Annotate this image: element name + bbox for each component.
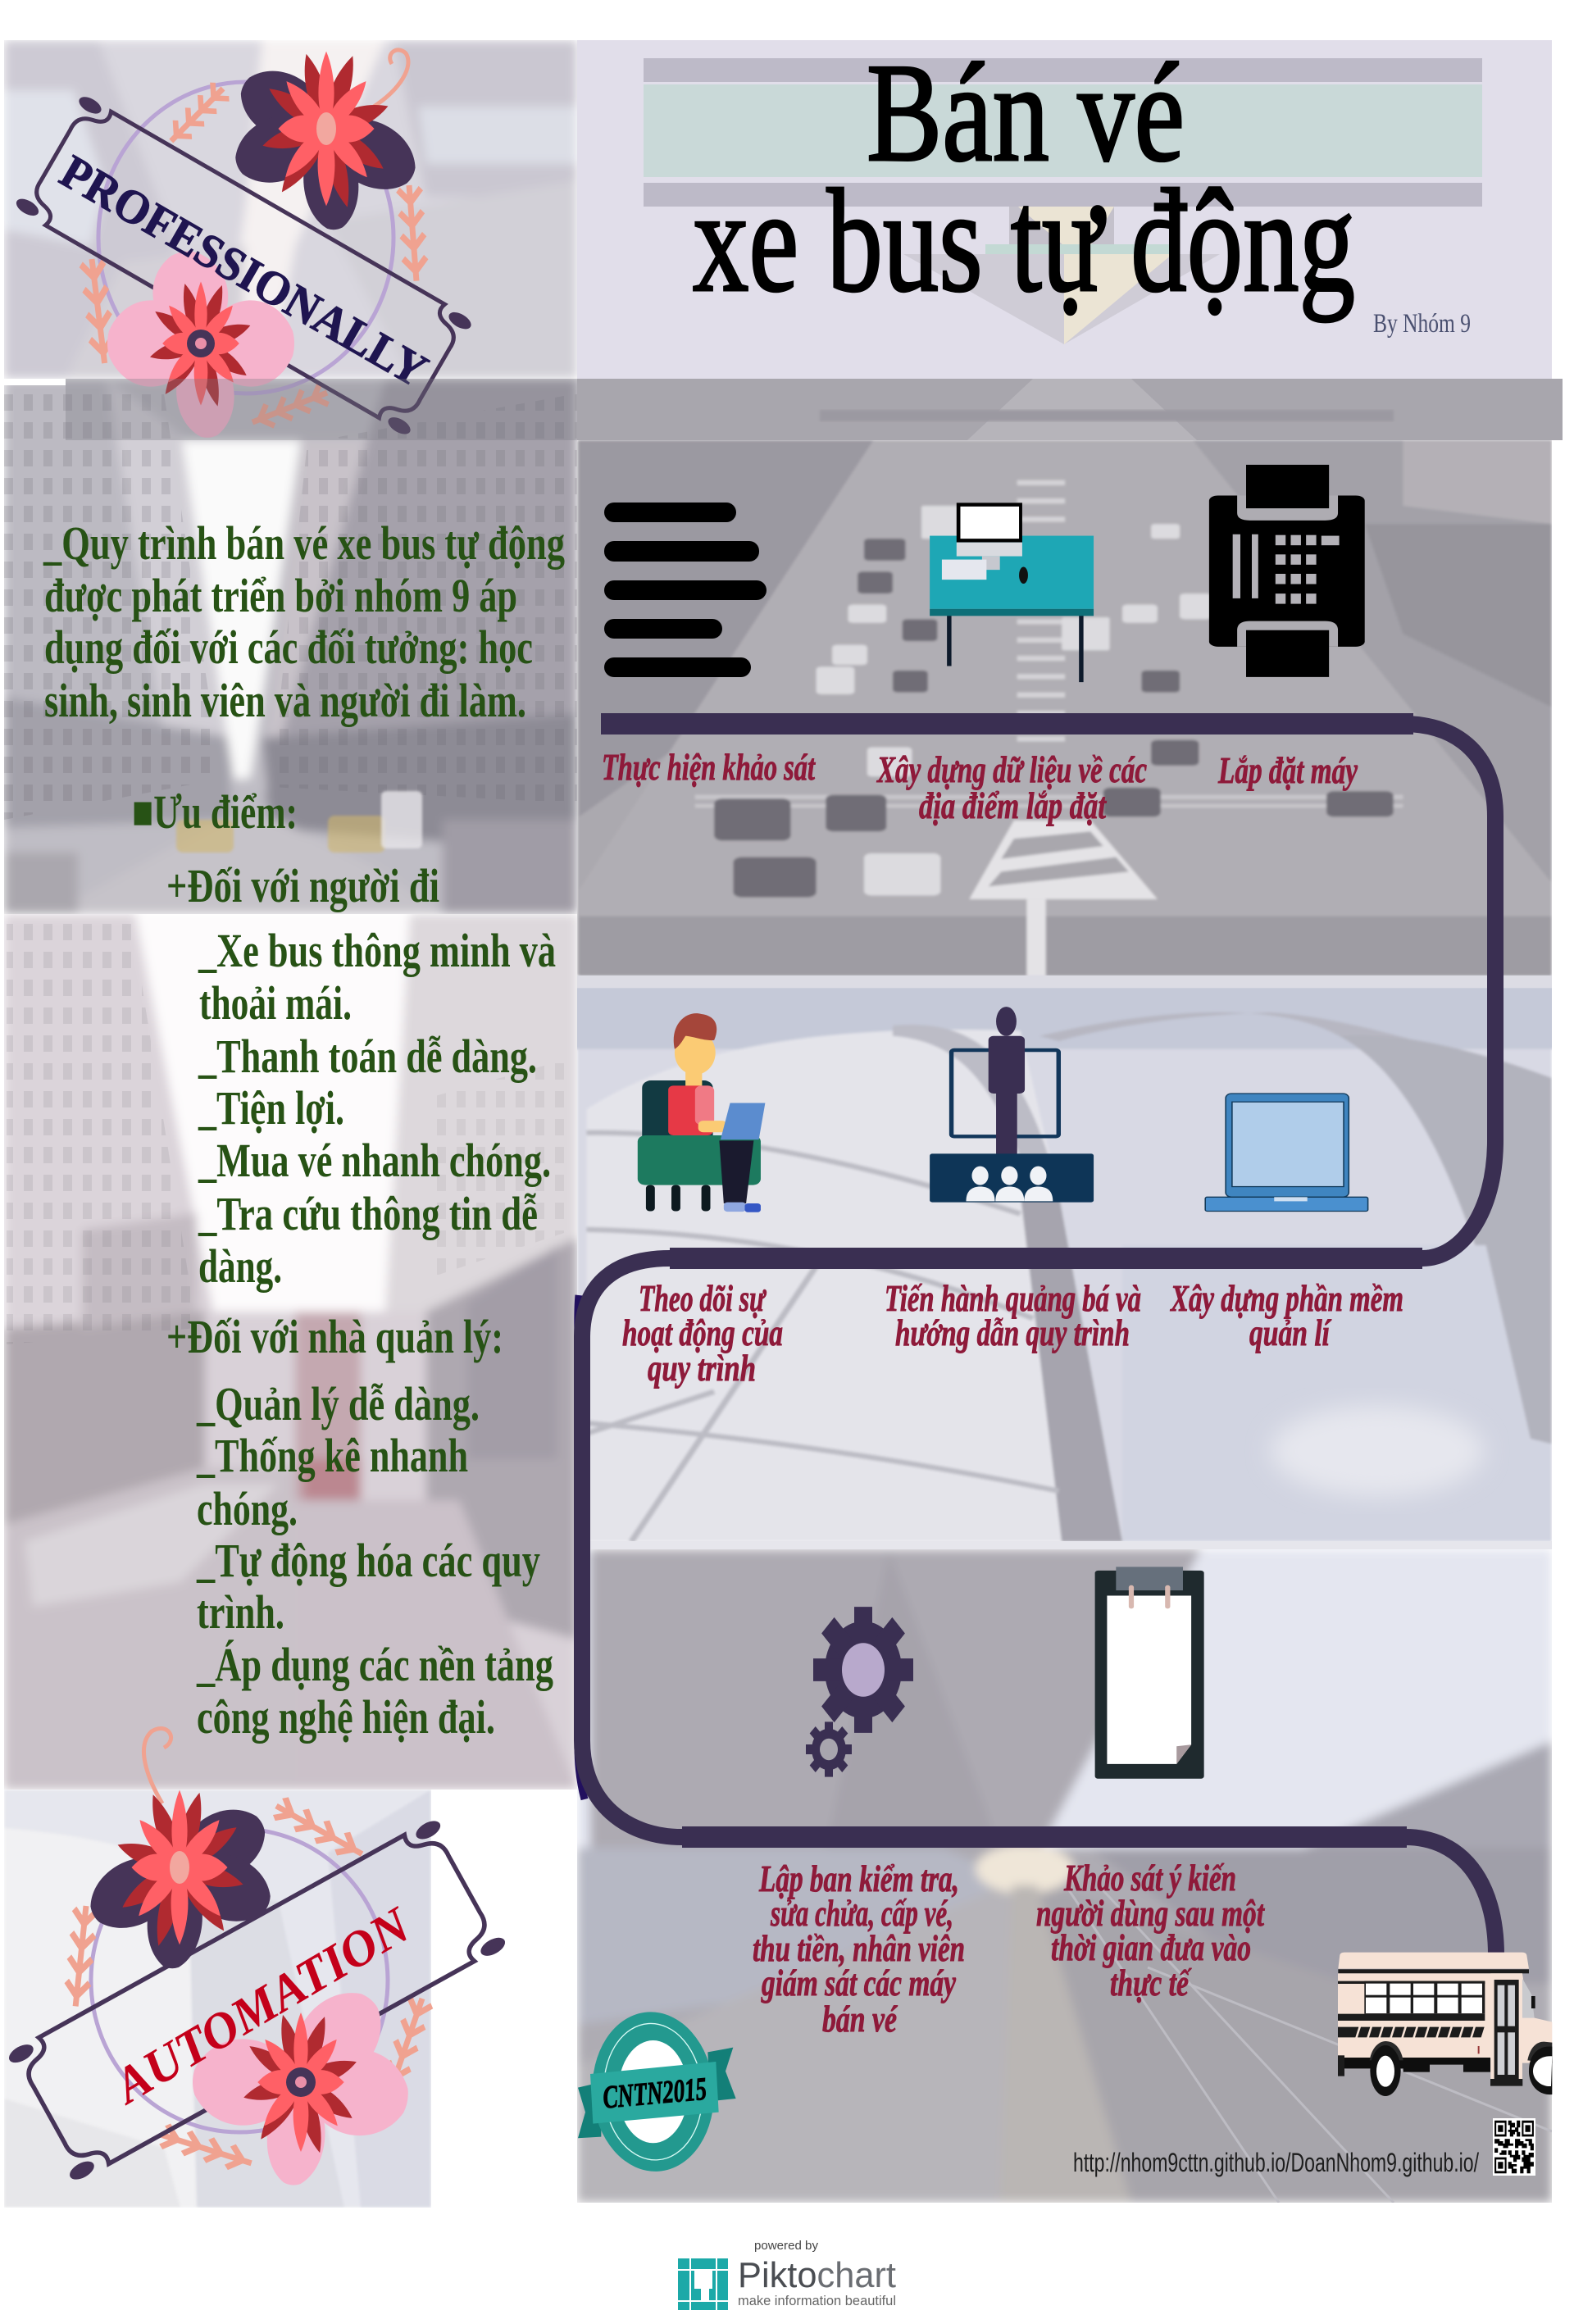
advantages heading: ■Ưu điểm: <box>132 785 298 839</box>
managers list: trình. <box>197 1585 284 1639</box>
banner frame <box>12 92 475 438</box>
label: build software <box>1170 1277 1403 1353</box>
riders list: _Thanh toán dễ dàng. <box>198 1030 537 1083</box>
managers list: _Tự động hóa các quy <box>196 1534 540 1587</box>
label: inspection team: bán vé <box>822 1998 898 2040</box>
leaf sprigs <box>80 50 428 433</box>
riders list: dàng. <box>198 1239 282 1293</box>
label: user survey: thực tế <box>1110 1962 1192 2003</box>
panel: station photo bottom right <box>577 1549 1552 2203</box>
label: step two: địa điểm lắp đặt <box>919 785 1107 826</box>
label: monitor operations: quy trình <box>648 1347 756 1389</box>
gray horizontal band, left overlay <box>66 379 577 440</box>
tagline: make information beautiful <box>738 2293 896 2308</box>
footer: Piktochart logo <box>678 2239 896 2310</box>
label: promotion <box>885 1277 1141 1353</box>
decoration: automation badge <box>3 1729 508 2188</box>
byline: By Nhóm 9 <box>1373 309 1471 339</box>
managers list: công nghệ hiện đại. <box>197 1690 495 1744</box>
label: step one: Thực hiện khảo sát <box>602 746 816 788</box>
banner frame <box>3 1816 508 2186</box>
label: step three: Lắp đặt máy <box>1217 749 1358 791</box>
icon: QR code <box>1493 2118 1535 2176</box>
icon: gears <box>806 1607 913 1777</box>
label: inspection team <box>753 1858 965 2040</box>
label: promotion: hướng dẫn quy trình <box>895 1312 1130 1353</box>
label: promotion: Tiến hành quảng bá và <box>885 1277 1141 1319</box>
title bars <box>644 58 1482 207</box>
wreath ring <box>98 82 394 393</box>
icon: desk with computer <box>930 503 1094 682</box>
label: user survey: thời gian đưa vào <box>1051 1926 1251 1968</box>
label: inspection team: giám sát các máy <box>761 1962 956 2003</box>
decoration: professionally badge <box>12 50 475 440</box>
flower top <box>78 1790 280 1971</box>
managers list: _Quản lý dễ dàng. <box>196 1377 480 1430</box>
panel: bottom left photo <box>4 1790 431 2208</box>
riders list: _Tra cứu thông tin dễ <box>198 1187 538 1240</box>
flower bottom <box>107 244 294 440</box>
label: user survey: người dùng sau một <box>1036 1892 1265 1934</box>
title line two: xe bus tự động <box>693 159 1355 322</box>
logo mark <box>678 2258 728 2310</box>
riders list <box>198 924 556 1293</box>
icon: fax machine <box>1209 465 1365 677</box>
intro paragraph: dụng đối với các đối tưởng: học <box>44 621 533 674</box>
panel: street photo left lower <box>4 914 577 1790</box>
badge: CNTN2015 <box>578 2008 736 2176</box>
process path <box>578 724 1496 1955</box>
riders list: _Xe bus thông minh và <box>198 924 556 977</box>
large gear <box>813 1607 913 1733</box>
label: inspection team: thu tiền, nhân viên <box>753 1927 965 1969</box>
intro paragraph <box>43 516 565 727</box>
label: user survey <box>1036 1857 1265 2003</box>
managers list: _Áp dụng các nền tảng <box>196 1638 553 1691</box>
title line one: Bán vé <box>867 35 1185 191</box>
managers list <box>196 1377 553 1744</box>
label: inspection team: Lập ban kiểm tra, <box>758 1858 959 1899</box>
banner word: PROFESSIONALLY <box>52 144 437 398</box>
riders list: _Mua vé nhanh chóng. <box>198 1134 551 1187</box>
panel: roof photo <box>574 986 1556 1542</box>
gray horizontal band under title, right <box>577 379 1563 440</box>
banner word: AUTOMATION <box>102 1896 421 2116</box>
managers list: chóng. <box>197 1482 298 1535</box>
small gear <box>806 1721 852 1777</box>
label: user survey: Khảo sát ý kiến <box>1063 1857 1236 1899</box>
icon: school bus <box>1338 1953 1552 2096</box>
panel: station photo top left <box>4 40 577 379</box>
managers heading: +Đối với nhà quản lý: <box>166 1310 503 1363</box>
wordmark: Piktochart <box>738 2255 896 2295</box>
wreath ring <box>91 1829 388 2132</box>
text block: left column introduction and advantages <box>43 516 565 1744</box>
intro paragraph: sinh, sinh viên và người đi làm. <box>44 674 526 727</box>
riders list: _Tiện lợi. <box>198 1081 344 1135</box>
label: build software: Xây dựng phần mềm <box>1170 1277 1403 1319</box>
panel: street photo left <box>4 379 577 914</box>
badge: CNTN2015: CNTN2015 <box>602 2071 708 2116</box>
riders list: thoải mái. <box>199 976 352 1030</box>
panel: road photo <box>577 440 1552 988</box>
intro paragraph: _Quy trình bán vé xe bus tự động <box>43 516 565 570</box>
flower bottom <box>193 1976 415 2188</box>
leaf sprigs <box>64 1729 433 2174</box>
icon: person with laptop in armchair <box>638 1013 765 1212</box>
icon: down arrow behind title <box>903 207 1220 344</box>
icon: laptop <box>1205 1094 1368 1212</box>
icon: presenter on stage <box>930 1007 1094 1203</box>
strip between photos <box>577 976 1552 988</box>
label: step two <box>876 748 1147 826</box>
managers list: _Thống kê nhanh <box>196 1429 468 1482</box>
label: monitor operations <box>622 1277 783 1389</box>
panel: title background <box>577 40 1552 379</box>
intro paragraph: được phát triển bởi nhóm 9 áp <box>44 569 517 622</box>
label: build software: quản lí <box>1249 1312 1331 1353</box>
powered by: powered by <box>754 2239 818 2253</box>
strip between photos two <box>577 1541 1552 1549</box>
label: monitor operations: hoạt động của <box>622 1312 783 1353</box>
label: monitor operations: Theo dõi sự <box>639 1277 767 1319</box>
label: inspection team: sửa chửa, cấp vé, <box>770 1892 953 1934</box>
flower top <box>225 52 428 232</box>
icon: clipboard <box>1095 1567 1204 1779</box>
label: step two: Xây dựng dữ liệu về các <box>876 748 1147 790</box>
icon: text lines <box>604 503 767 677</box>
riders heading: +Đối với người đi <box>166 859 439 912</box>
